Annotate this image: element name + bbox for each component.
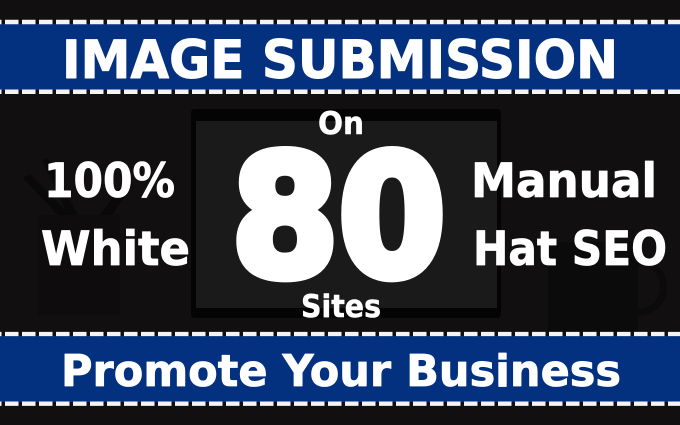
heading: IMAGE SUBMISSION: [62, 30, 618, 91]
text: Manual Hat SEO: Manual: [471, 154, 657, 209]
text: 100% White: 100%: [44, 154, 175, 209]
icon: pen cup silhouette: [23, 158, 133, 315]
laptop screen: [196, 121, 497, 308]
banner band: [0, 336, 680, 402]
text: On: On: [318, 106, 364, 142]
top dashed border: [0, 20, 680, 24]
text: 100% White: [41, 154, 190, 277]
tagline: Promote Your Business: [61, 346, 621, 397]
banner band: [0, 24, 680, 90]
bottom dashed border: [0, 89, 680, 94]
text: 100% White: White: [41, 222, 190, 277]
laptop bezel: [191, 109, 501, 318]
panel: bottom banner: [0, 334, 680, 404]
laptop: [191, 109, 501, 318]
bottom dashed border: [0, 402, 680, 406]
text: Sites: Sites: [301, 289, 381, 325]
big number 80: 80: [232, 121, 446, 315]
text: Manual Hat SEO: [471, 154, 667, 277]
top dashed border: [0, 332, 680, 336]
icon: mug silhouette: [548, 242, 664, 332]
panel: top banner: [0, 22, 680, 92]
